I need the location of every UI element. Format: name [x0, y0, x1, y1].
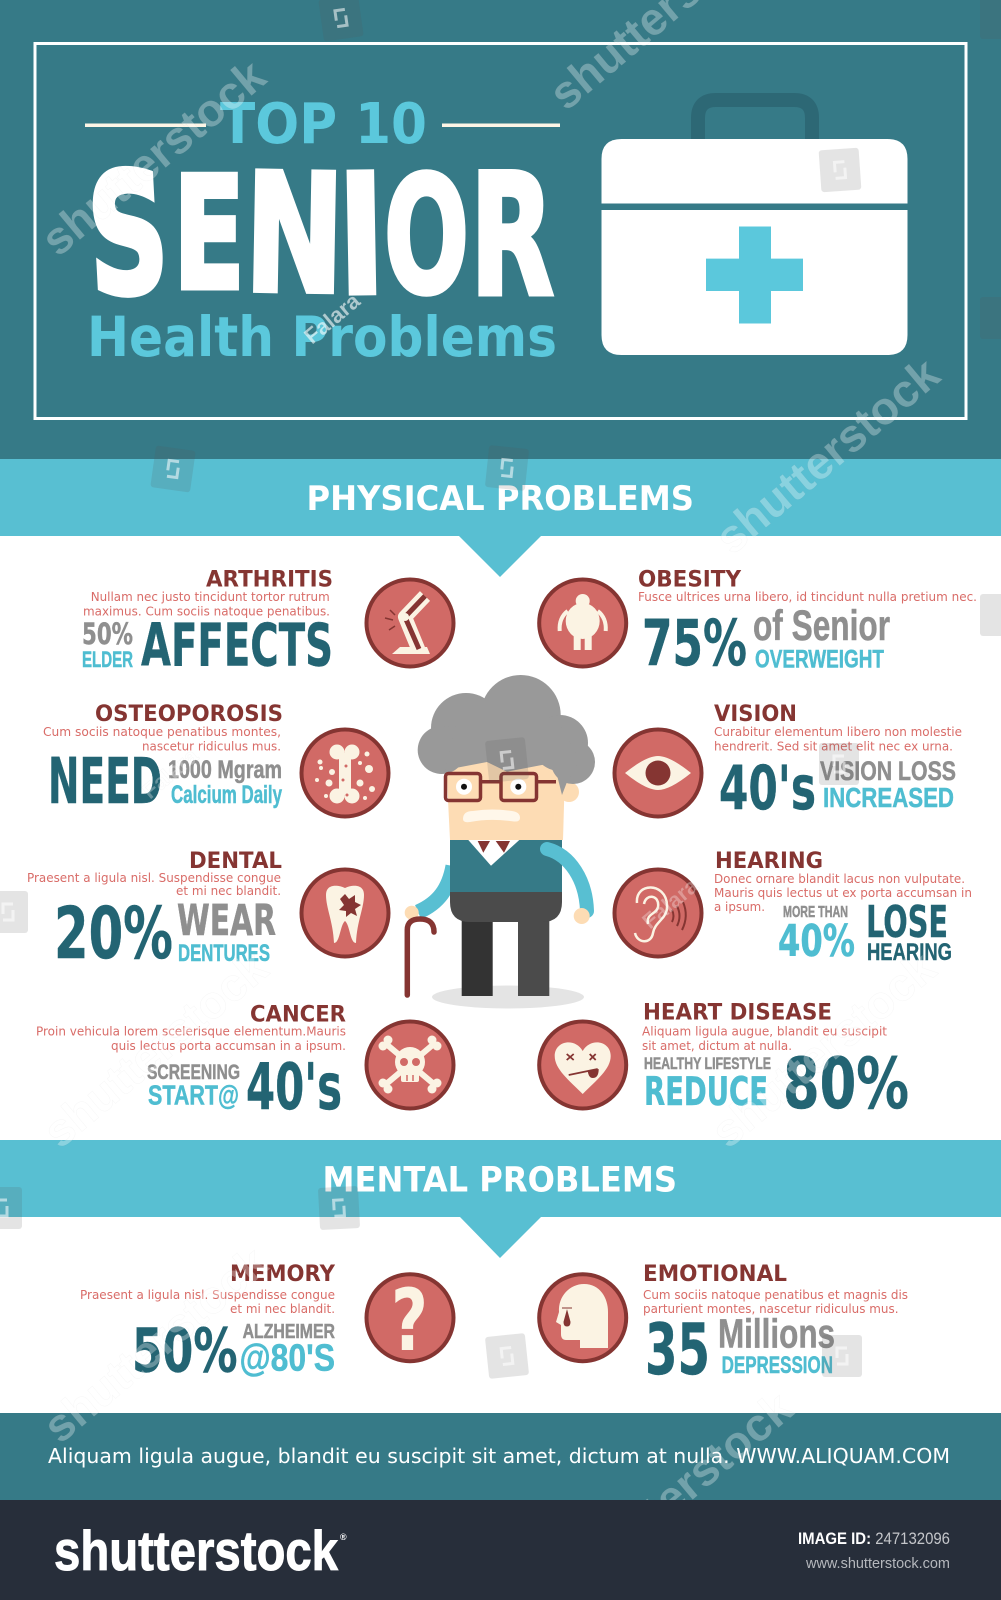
watermarks: shutterstock: [705, 347, 949, 564]
panel: hearing: 40%: [778, 916, 855, 967]
image id: IMAGE ID: 247132096: [798, 1529, 950, 1548]
panel: memory: 50%: [132, 1316, 238, 1387]
panel: dental: 20%: [54, 892, 173, 975]
panel: osteoporosis: [43, 702, 388, 818]
moustache: [463, 810, 520, 822]
panel: memory: ALZHEIMER: [243, 1321, 335, 1343]
panel: physical problems banner: [0, 459, 1001, 577]
hair: [418, 675, 595, 795]
panel: hearing: Mauris quis lectus ut ex porta accumsan in: [714, 886, 972, 901]
icon: question mark: [366, 1271, 454, 1371]
title: senior: S: [83, 135, 173, 335]
panel: obesity: 75%: [642, 607, 747, 680]
panel: obesity: OVERWEIGHT: [755, 645, 884, 673]
panel: dental: Praesent a ligula nisl. Suspendisse congue: [27, 871, 281, 886]
panel: hearing: HEARING: [867, 939, 952, 966]
panel: cancer: quis lectus porta accumsan in a ipsum.: [111, 1039, 346, 1054]
collar: [468, 840, 519, 866]
panel: vision: INCREASED: [823, 782, 954, 813]
icon: dead heart: [539, 1022, 626, 1108]
panel: obesity: [539, 568, 977, 680]
panel: arthritis: [82, 568, 454, 680]
icon: ear: [614, 870, 702, 956]
panel: emotional: Millions: [718, 1311, 835, 1357]
footer text: Aliquam ligula augue, blandit eu suscipit sit amet, dictum at nulla. WWW.ALIQUAM.COM: [48, 1444, 950, 1468]
legs: [462, 918, 549, 996]
logo: ®: [340, 1532, 347, 1542]
ear: [559, 782, 579, 802]
panel: obesity: Fusce ultrices urna libero, id tincidunt nulla pretium nec.: [638, 590, 977, 605]
panel: hearing: LOSE: [866, 897, 948, 948]
trousers: [450, 892, 562, 922]
watermarks: shutterstock: [33, 941, 277, 1158]
panel: heart disease: 80%: [783, 1043, 909, 1125]
panel: heart disease: HEART DISEASE: [643, 1000, 832, 1026]
title: senior: R: [470, 138, 554, 334]
panel: osteoporosis: Cum sociis natoque penatibus montes,: [43, 725, 281, 740]
eyes: [456, 779, 526, 795]
panel: emotional: Cum sociis natoque penatibus et magnis dis: [643, 1288, 908, 1303]
panel: memory: Praesent a ligula nisl. Suspendisse congue: [80, 1288, 335, 1303]
panel: header: [0, 0, 1001, 460]
panel: arthritis: ELDER: [82, 647, 133, 672]
panel: osteoporosis: 1000 Mgram: [168, 756, 282, 784]
panel: heart disease: HEALTHY LIFESTYLE: [644, 1054, 771, 1073]
title: top 10: TOP 10: [220, 92, 427, 157]
panel: footer strip: [0, 1413, 1001, 1500]
panel: vision: 40's: [719, 753, 816, 824]
panel: memory: MEMORY: [230, 1262, 336, 1287]
panel: heart disease: [539, 1000, 909, 1125]
website: www.shutterstock.com: [805, 1555, 950, 1572]
panel: vision: VISION LOSS: [820, 756, 956, 786]
panel: heart disease: REDUCE: [644, 1070, 768, 1115]
panel: emotional: DEPRESSION: [722, 1352, 833, 1379]
panel: arthritis: 50%: [82, 617, 133, 651]
title: senior: [83, 135, 554, 335]
right hand: [574, 908, 590, 924]
title: health problems: Health Problems: [87, 305, 557, 369]
panel: emotional: parturient montes, nascetur ridiculus mus.: [643, 1302, 898, 1317]
panel: memory: [80, 1262, 454, 1387]
watermarks: shutterstock: [33, 1236, 277, 1453]
illustration: senior man: [405, 675, 595, 1008]
heading: mental problems: MENTAL PROBLEMS: [322, 1161, 677, 1201]
title: senior: O: [384, 143, 469, 331]
panel: dental: et mi nec blandit.: [176, 884, 281, 899]
panel: arthritis: Nullam nec justo tincidunt tortor rutrum: [91, 590, 330, 605]
panel: hearing: Donec ornare blandit lacus non vulputate.: [714, 872, 965, 887]
panel: dental: [27, 849, 388, 975]
panel: arthritis: AFFECTS: [141, 610, 333, 680]
logo: shutterstock: [54, 1519, 339, 1582]
panel: dental: DENTAL: [189, 849, 282, 874]
watermarks: shutterstock: [701, 941, 945, 1158]
panel: dental: DENTURES: [178, 940, 270, 967]
panel: dental: WEAR: [177, 896, 276, 946]
header frame: [35, 44, 966, 418]
panel: cancer: CANCER: [250, 1002, 346, 1027]
panel: cancer: Proin vehicula lorem scelerisque elementum.Mauris: [36, 1025, 346, 1040]
head: [446, 760, 565, 840]
title: senior: E: [173, 143, 245, 325]
panel: obesity: of Senior: [753, 602, 890, 650]
panel: osteoporosis: Calcium Daily: [171, 781, 282, 809]
watermarks: Falara: [637, 873, 703, 934]
icon: tooth: [302, 870, 388, 956]
panel: hearing: MORE THAN: [783, 904, 848, 921]
panel: memory: et mi nec blandit.: [230, 1302, 335, 1317]
panel: cancer: SCREENING: [147, 1061, 240, 1084]
title: senior: N: [243, 138, 346, 331]
icon: knee: [366, 580, 454, 666]
icon: overweight body: [539, 580, 626, 666]
panel: vision: Curabitur elementum libero non molestie: [714, 725, 962, 740]
panel: shutterstock bar: [0, 1500, 1001, 1600]
panel: cancer: START@: [148, 1080, 239, 1110]
collar tips: [478, 841, 510, 853]
left hand: [405, 906, 419, 920]
panel: hearing: [614, 849, 972, 967]
panel: osteoporosis: NEED: [48, 745, 162, 818]
left arm: [418, 866, 453, 912]
panel: hearing: a ipsum.: [714, 900, 765, 915]
panel: vision: VISION: [714, 702, 797, 727]
right arm: [547, 849, 587, 911]
panel: arthritis: ARTHRITIS: [206, 568, 333, 593]
icon: skull and crossbones: [366, 1022, 454, 1108]
icon: medical kit: [602, 100, 908, 355]
panel: osteoporosis: nascetur ridiculus mus.: [142, 740, 281, 754]
cane: [407, 919, 434, 995]
watermarks: Falara: [299, 288, 365, 349]
panel: emotional: [539, 1262, 908, 1391]
heading: physical problems: PHYSICAL PROBLEMS: [306, 479, 694, 519]
icon: crying head: [539, 1274, 626, 1361]
icon: eye: [614, 730, 702, 816]
icon: bone: [302, 730, 388, 816]
sweater: [450, 840, 562, 892]
panel: cancer: 40's: [246, 1051, 342, 1125]
title: top 10: [85, 92, 560, 157]
panel: osteoporosis: OSTEOPOROSIS: [95, 702, 283, 727]
panel: hearing: HEARING: [715, 849, 823, 874]
shadow: [432, 986, 584, 1008]
panel: vision: [614, 702, 962, 824]
panel: arthritis: maximus. Cum sociis natoque penatibus.: [83, 604, 330, 619]
panel: emotional: 35: [645, 1309, 710, 1391]
watermarks: shutterstock: [558, 1381, 802, 1598]
panel: obesity: OBESITY: [638, 568, 742, 593]
panel: heart disease: Aliquam ligula augue, blandit eu suscipit: [642, 1025, 887, 1040]
watermarks: Falara: [137, 743, 203, 804]
panel: memory: @80'S: [240, 1338, 335, 1380]
glasses: [446, 774, 556, 800]
icon: question mark: ?: [391, 1271, 428, 1371]
panel: heart disease: sit amet, dictum at nulla.: [642, 1039, 792, 1054]
watermarks: shutterstock: [31, 49, 275, 266]
panel: emotional: EMOTIONAL: [643, 1262, 787, 1287]
panel: mental problems banner: [0, 1140, 1001, 1258]
panel: vision: hendrerit. Sed sit amet elit nec ex urna.: [714, 740, 953, 754]
panel: cancer: [36, 1002, 454, 1125]
title: senior: I: [336, 140, 387, 333]
